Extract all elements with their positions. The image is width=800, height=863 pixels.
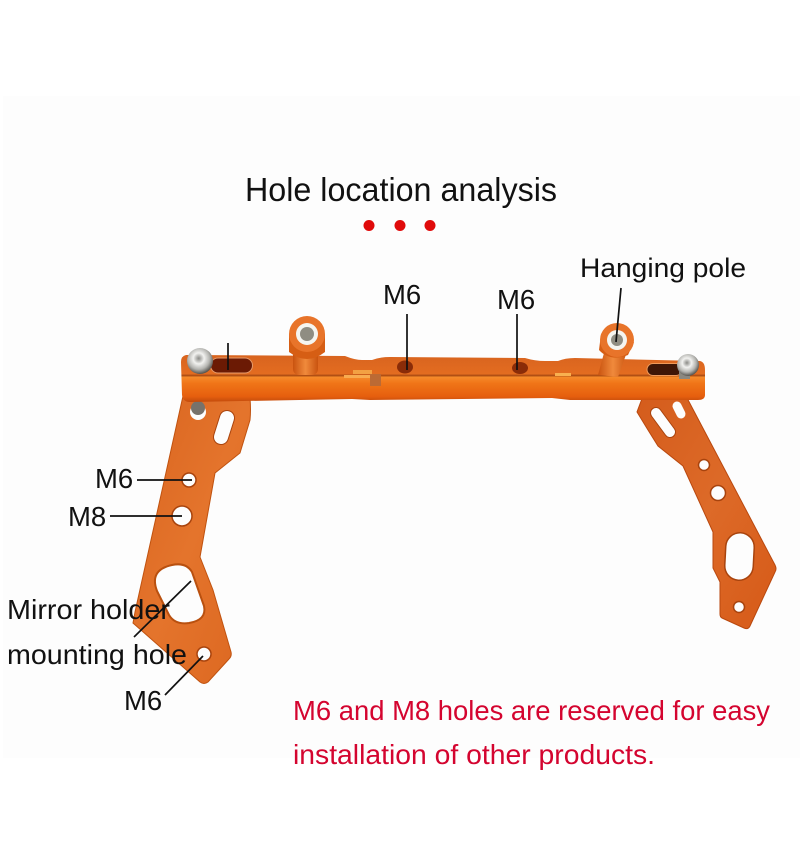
title: Hole location analysis bbox=[245, 171, 557, 208]
label: M6 top left: M6 bbox=[383, 279, 421, 310]
label: hanging pole: Hanging pole bbox=[580, 253, 746, 283]
M6 holes in bar bbox=[397, 360, 413, 374]
label: mirror holder mounting hole: Mirror holder bbox=[7, 594, 170, 625]
upper slot bbox=[221, 418, 227, 437]
red note bbox=[293, 695, 770, 770]
label: M6 top right: M6 bbox=[497, 284, 535, 315]
left bracket bbox=[133, 396, 250, 684]
label: mirror holder mounting hole bbox=[7, 594, 187, 670]
right bolt bbox=[677, 354, 699, 379]
slots in bar bbox=[218, 358, 245, 374]
right bracket bbox=[637, 396, 776, 629]
bolt cutout bbox=[190, 404, 206, 420]
holes bbox=[182, 473, 196, 487]
label: M6 bottom: M6 bbox=[124, 685, 162, 716]
label: M6 bracket: M6 bbox=[95, 463, 133, 494]
title dots bbox=[364, 220, 436, 231]
label: mirror holder mounting hole: mounting hole bbox=[7, 639, 187, 670]
red note: installation of other products. bbox=[293, 739, 655, 770]
main cross bar bbox=[181, 355, 705, 402]
red note: M6 and M8 holes are reserved for easy bbox=[293, 695, 770, 726]
left post bbox=[289, 316, 325, 375]
right post bbox=[598, 323, 634, 377]
label: M8 bracket: M8 bbox=[68, 501, 106, 532]
left bolt bbox=[187, 348, 213, 374]
leader lines bbox=[110, 288, 621, 695]
